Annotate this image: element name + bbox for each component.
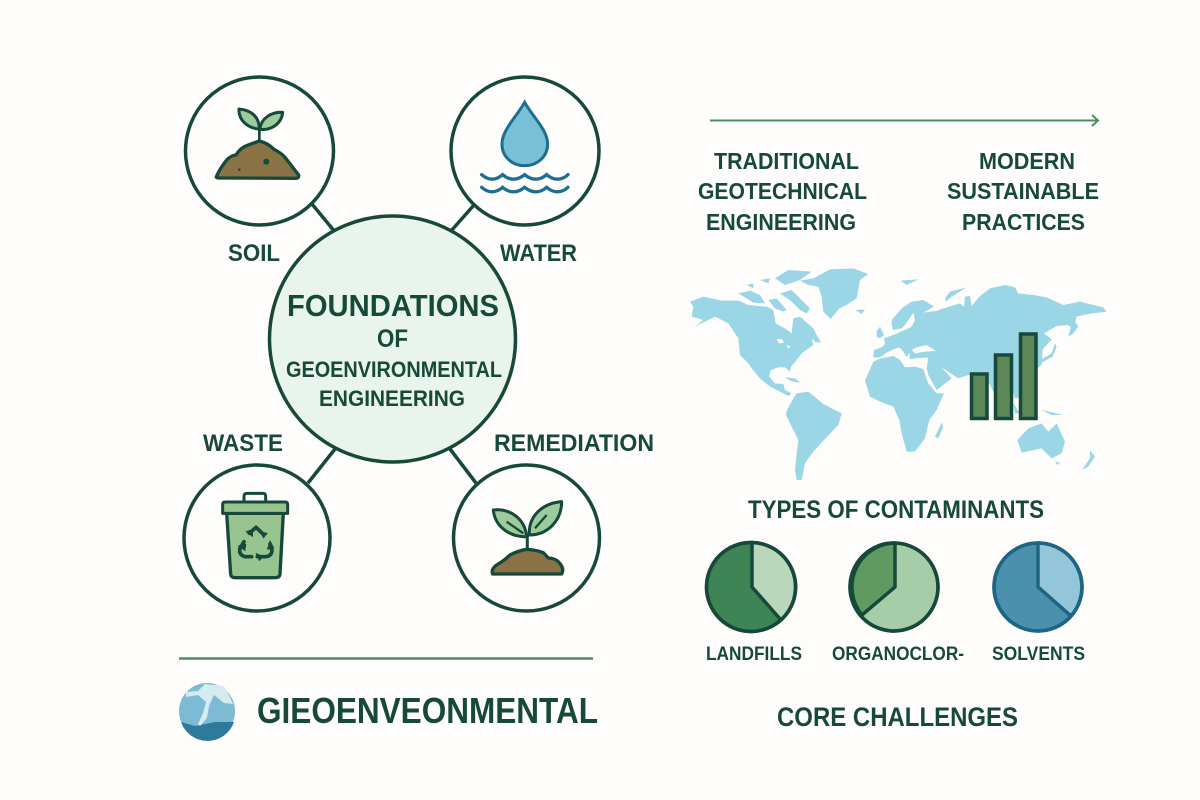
arrow: traditional to modern <box>710 115 1098 126</box>
text: modern sustainable practices: MODERN <box>979 148 1075 174</box>
bar chart <box>972 334 1036 418</box>
icon: recycling bin <box>223 493 288 578</box>
world map <box>690 268 1107 480</box>
connector: waste to hub <box>308 449 335 483</box>
heading: core challenges: CORE CHALLENGES <box>777 702 1018 732</box>
hub title: OF <box>377 325 408 353</box>
pie: landfills <box>706 542 796 632</box>
panel: contaminant pie charts <box>706 542 1085 665</box>
hub title: FOUNDATIONS <box>287 288 499 323</box>
brand wordmark: GIEOENVEONMENTAL <box>257 690 598 731</box>
label: organoclor: ORGANOCLOR- <box>832 644 964 665</box>
hub title: GEOENVIRONMENTAL <box>286 357 502 382</box>
hub title <box>286 288 502 411</box>
icon: soil mound with sprout <box>216 109 299 178</box>
label: water: WATER <box>500 240 577 267</box>
divider line above brand <box>179 657 593 660</box>
pie: organochlorines <box>850 543 938 631</box>
central hub circle <box>270 216 516 462</box>
water node <box>451 77 599 225</box>
world map with bar chart <box>690 268 1107 480</box>
label: landfills: LANDFILLS <box>706 644 802 665</box>
soil node <box>186 77 334 225</box>
text: traditional geotechnical engineering: TRADITIONAL <box>714 148 859 174</box>
connector: soil to hub <box>312 204 335 232</box>
text: traditional geotechnical engineering <box>698 148 867 235</box>
panel: evolution timeline <box>698 115 1099 235</box>
text: modern sustainable practices: PRACTICES <box>962 209 1085 235</box>
waste node <box>184 465 330 611</box>
connector: remediation to hub <box>450 449 476 483</box>
connector: water to hub <box>451 205 474 231</box>
panel: concept hub diagram <box>184 77 654 611</box>
pie: solvents <box>994 543 1082 631</box>
icon: water drop and waves <box>482 102 568 192</box>
hub title: ENGINEERING <box>319 386 465 411</box>
label: solvents: SOLVENTS <box>992 644 1085 665</box>
heading: types of contaminants: TYPES OF CONTAMINANTS <box>748 496 1044 524</box>
text: modern sustainable practices: SUSTAINABLE <box>947 178 1099 204</box>
icon: plant growing from soil <box>492 502 563 574</box>
label: soil: SOIL <box>228 240 280 267</box>
brand footer <box>179 683 598 741</box>
text: traditional geotechnical engineering: ENGINEERING <box>706 209 856 235</box>
text: traditional geotechnical engineering: GEOTECHNICAL <box>698 178 867 204</box>
text: modern sustainable practices <box>947 148 1099 235</box>
icon: earth logo <box>179 683 235 741</box>
label: remediation: REMEDIATION <box>494 430 654 457</box>
label: waste: WASTE <box>203 430 283 457</box>
remediation node <box>454 465 600 611</box>
